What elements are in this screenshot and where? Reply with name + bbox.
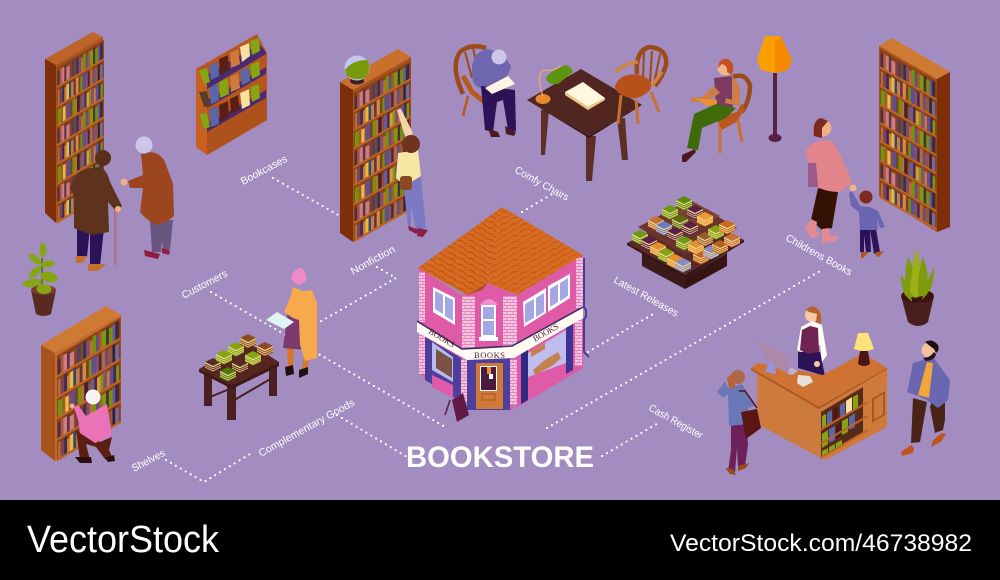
label: Shelves: Shelves — [130, 447, 167, 475]
reading scene: man in chair — [456, 46, 516, 137]
bookcase: lower left — [41, 306, 121, 462]
person: receptionist — [797, 306, 827, 376]
icon: potted plant left — [22, 243, 59, 316]
upper right windows — [523, 288, 546, 327]
label: Childrens Books: Childrens Books — [784, 232, 854, 278]
bookcase: curved display rack — [196, 34, 267, 155]
A-frame sign — [445, 393, 469, 422]
building: bookstore — [417, 207, 589, 422]
upper left window — [433, 287, 455, 325]
floor lamp — [757, 36, 792, 142]
person: child — [849, 190, 885, 258]
sign text: BOOKS — [427, 326, 457, 350]
person: woman in yellow coat — [266, 268, 317, 378]
icon: potted plant right — [901, 248, 934, 326]
ground floor centre door — [467, 358, 510, 410]
ground floor right — [521, 348, 528, 404]
label: Customers: Customers — [180, 268, 230, 302]
bookcase: top right — [879, 38, 950, 232]
person: old woman — [120, 136, 174, 259]
person: kneeling man at shelf — [70, 390, 115, 463]
person: customer with bag — [717, 370, 761, 475]
reading table with book and lamp — [527, 65, 642, 181]
bookcase: nonfiction — [340, 49, 411, 242]
bookcase: top left — [45, 32, 104, 224]
leaflets — [797, 375, 813, 387]
sign band — [417, 308, 583, 360]
table lamp — [854, 333, 874, 352]
reading scene: woman in chair — [682, 59, 750, 162]
connector lines — [166, 178, 822, 482]
book pyramid display — [627, 196, 744, 289]
footer: VectorStock wordmark: VectorStock — [27, 519, 220, 561]
empty chair — [615, 47, 666, 124]
label: Bookcases: Bookcases — [239, 153, 289, 188]
right wall — [516, 255, 583, 408]
centre bay — [462, 283, 516, 410]
roof — [418, 207, 502, 295]
label: Latest Releases: Latest Releases — [612, 274, 680, 320]
label: Complementary Goods: Complementary Goods — [257, 397, 357, 460]
cash register counter — [751, 333, 887, 460]
person: man with beard — [901, 341, 950, 456]
person: old man with cane — [70, 150, 122, 271]
footer bar — [0, 500, 1000, 580]
icon: globe — [344, 56, 370, 84]
label: Cash Register: Cash Register — [647, 402, 705, 442]
footer: image id: VectorStock.com/46738982 — [670, 530, 972, 557]
label: Nonfiction: Nonfiction — [349, 243, 397, 278]
left wall — [419, 268, 463, 403]
person: woman reaching — [396, 109, 428, 237]
building: bookstore: BOOKS — [474, 350, 505, 360]
monitor — [757, 340, 790, 375]
upper centre window — [480, 299, 498, 305]
display table with books — [199, 334, 279, 419]
label: Comfy Chairs: Comfy Chairs — [513, 164, 571, 204]
ground floor left — [425, 337, 461, 402]
title: BOOKSTORE — [406, 441, 594, 474]
building: bookstore: BOOKS — [531, 321, 560, 344]
person: mother with bag — [805, 118, 856, 243]
